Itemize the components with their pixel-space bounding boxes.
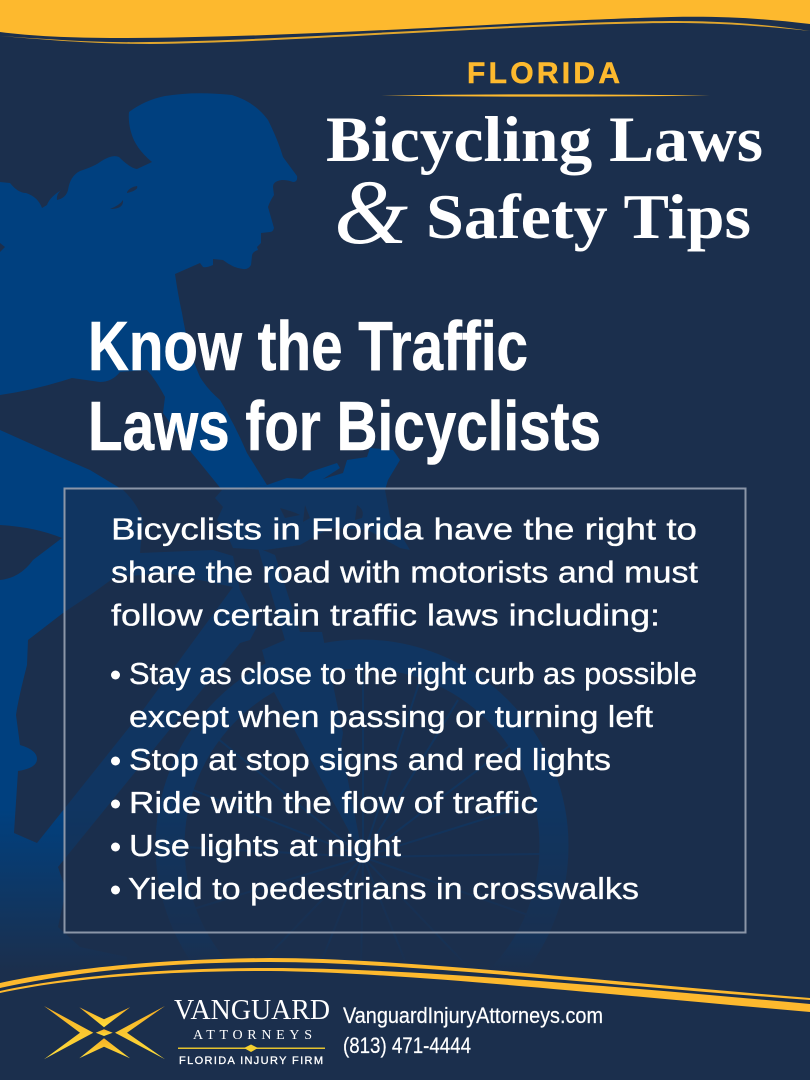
title: Bicycling Laws & Safety Tips: & xyxy=(334,161,408,263)
intro paragraph: Bicyclists in Florida have the right to xyxy=(111,512,697,546)
contact details xyxy=(343,1003,603,1058)
intro paragraph: follow certain traffic laws including: xyxy=(111,598,660,632)
background cyclist silhouette xyxy=(0,93,554,1038)
bullet list of laws: except when passing or turning left xyxy=(129,699,653,734)
title: Bicycling Laws & Safety Tips xyxy=(326,104,763,263)
gold rule under FLORIDA xyxy=(380,94,710,97)
bullet list of laws: Yield to pedestrians in crosswalks xyxy=(128,871,639,906)
bottom fade over silhouette xyxy=(0,810,810,1080)
bullet list of laws: Ride with the flow of traffic xyxy=(129,785,538,820)
logo wordmark: Vanguard Attorneys: VANGUARD xyxy=(174,995,330,1026)
icon: Vanguard X logo mark xyxy=(44,1006,165,1059)
intro paragraph xyxy=(111,512,698,632)
heading: Know the Traffic Laws for Bicyclists: Know the Traffic xyxy=(88,307,528,385)
hand on handlebar xyxy=(215,448,410,550)
intro paragraph: share the road with motorists and must xyxy=(111,554,698,590)
title: Bicycling Laws & Safety Tips: Safety Tips xyxy=(426,182,751,252)
bullet list of laws: Use lights at night xyxy=(129,828,401,863)
heading: Know the Traffic Laws for Bicyclists: Laws for Bicyclists xyxy=(88,387,601,465)
contact details: VanguardInjuryAttorneys.com xyxy=(343,1003,603,1028)
top gold wave band xyxy=(0,0,810,44)
bullet list of laws: Stay as close to the right curb as possible xyxy=(129,656,697,691)
bottom gold swooshes xyxy=(0,958,810,1012)
bullet list of laws xyxy=(111,656,697,906)
title: Bicycling Laws & Safety Tips: Bicycling Laws xyxy=(326,104,763,176)
rider thigh, shin and lower body xyxy=(0,430,258,1000)
bicycle wheel xyxy=(170,654,554,1038)
bicycle fork xyxy=(258,548,363,857)
logo wordmark: Vanguard Attorneys: ATTORNEYS xyxy=(193,1028,312,1043)
panel: traffic laws box xyxy=(64,488,746,932)
logo wordmark: Vanguard Attorneys: FLORIDA INJURY FIRM xyxy=(179,1055,323,1067)
bullet list of laws: Stop at stop signs and red lights xyxy=(129,742,611,777)
rider head, torso and arm xyxy=(0,93,297,490)
heading: FLORIDA: FLORIDA xyxy=(467,57,620,90)
logo wordmark: Vanguard Attorneys xyxy=(174,995,330,1067)
contact details: (813) 471-4444 xyxy=(343,1033,471,1058)
dark gaps in silhouette xyxy=(0,186,363,843)
heading: Know the Traffic Laws for Bicyclists xyxy=(88,307,601,465)
